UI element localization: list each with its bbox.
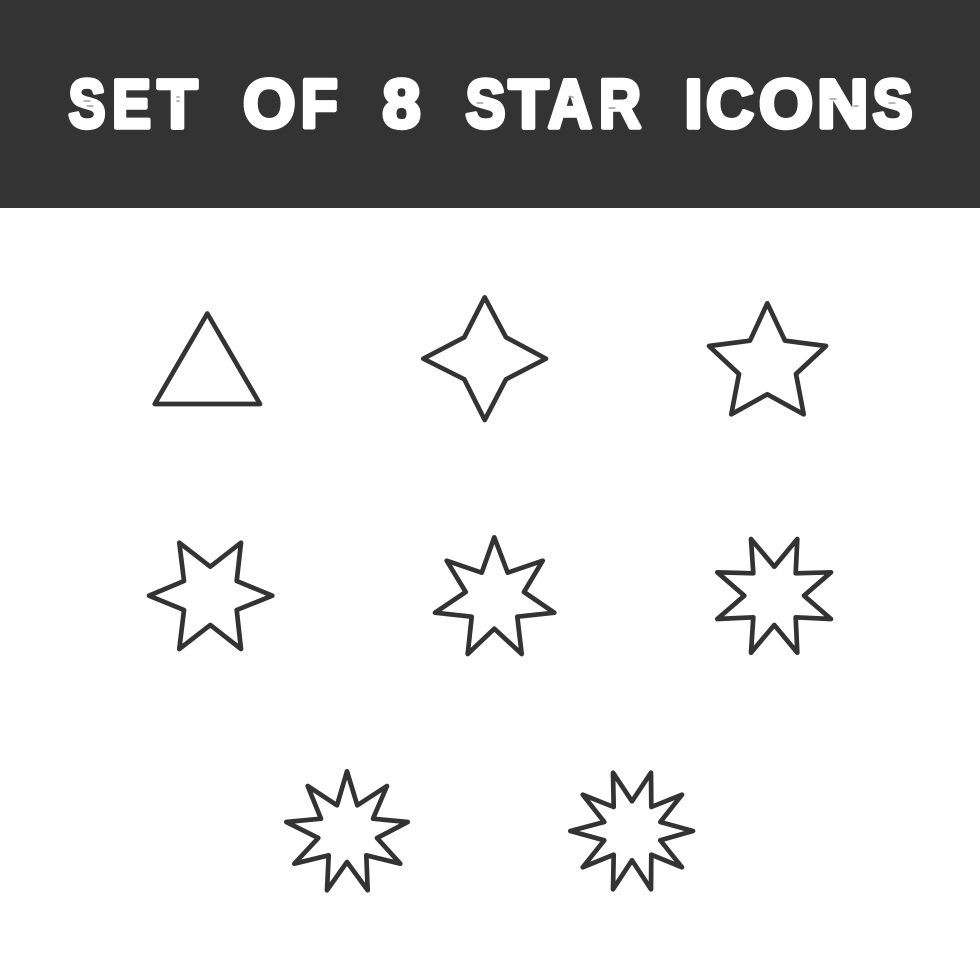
title: F: [301, 65, 338, 142]
icon: five-point star: [709, 303, 826, 414]
title: A: [548, 65, 592, 142]
title: C: [706, 65, 754, 142]
icon: seven-point star: [435, 537, 554, 654]
title: S: [466, 65, 506, 142]
title: N: [817, 65, 868, 142]
title: O: [759, 65, 813, 142]
icon: six-point star: [149, 543, 272, 649]
title: E: [112, 65, 151, 142]
title: O: [243, 65, 296, 142]
icon: triangle: [155, 314, 260, 404]
icon: ten-point star: [570, 773, 693, 889]
title: T: [158, 65, 198, 142]
title: S: [872, 65, 912, 142]
title: [68, 65, 912, 142]
icon: eight-point star: [717, 539, 831, 653]
title: 8: [382, 65, 420, 142]
title: R: [599, 65, 641, 142]
title: S: [68, 65, 106, 142]
icon: four-point star: [423, 297, 546, 420]
header banner: [0, 0, 980, 208]
title: I: [684, 65, 702, 142]
icon: nine-point star: [286, 771, 408, 890]
title: T: [508, 65, 548, 142]
